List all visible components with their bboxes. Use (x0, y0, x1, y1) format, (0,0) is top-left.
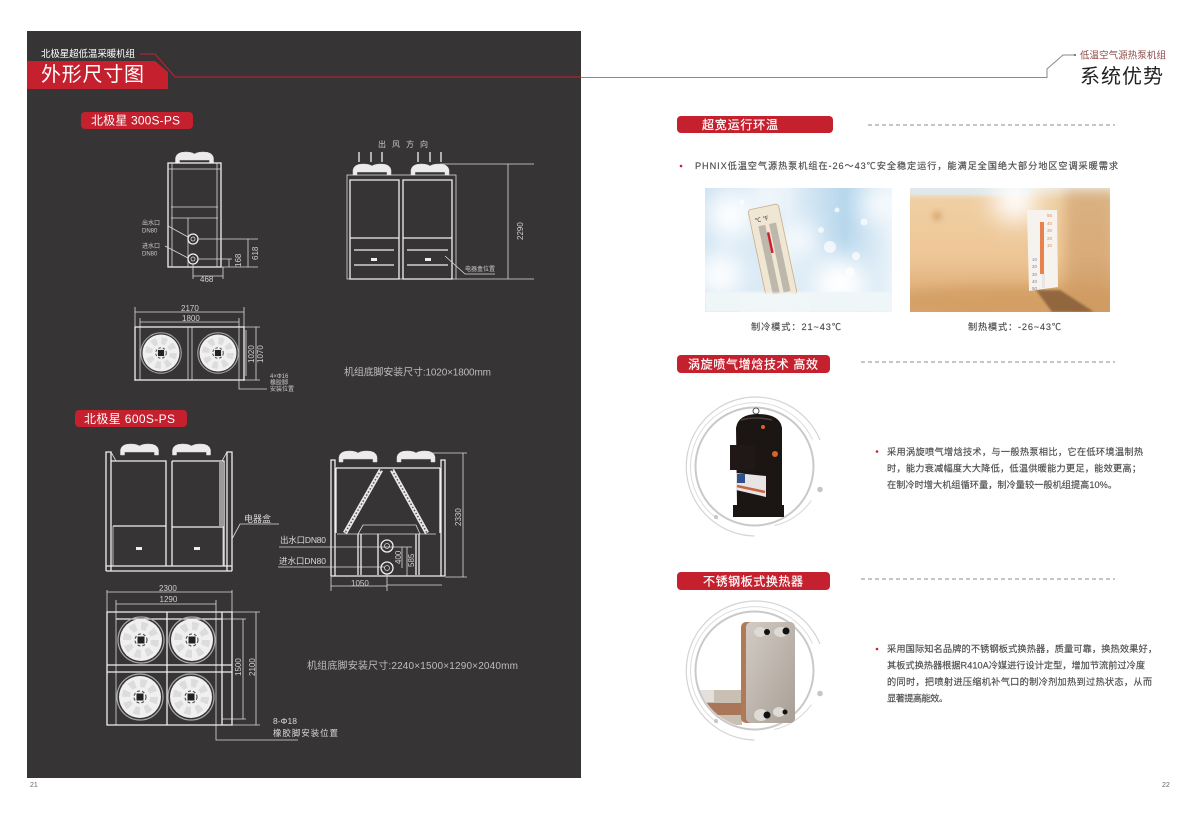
caption: heating mode: 制热模式：-26~43℃ (968, 321, 1061, 332)
panel: dark dimensions page (27, 31, 581, 778)
model pill: 600S-PS: 北极星 600S-PS (84, 412, 175, 426)
leader line: gray header rule (581, 55, 1075, 78)
drawing: 600S side view: 2330 (454, 508, 463, 526)
image: thermometer in sand (910, 188, 1110, 312)
drawing: 300S top view: 1020 (247, 345, 256, 363)
drawing: 600S side view: 400 (394, 550, 403, 564)
page number 22: 22 (1162, 782, 1170, 789)
image: thermometer in snow (705, 188, 892, 312)
heading: 系统优势 block (1074, 50, 1166, 88)
heading: 系统优势 block: 系统优势 (1080, 65, 1163, 88)
image: plate heat exchanger in rings (686, 601, 823, 740)
image: thermometer in sand: 20 (1032, 264, 1038, 269)
image: scroll compressor in rings (686, 397, 823, 536)
drawing: 600S top view: 2300 (159, 584, 177, 593)
drawing: 300S side view (142, 152, 260, 284)
drawing: 300S side view: DN80 (142, 228, 158, 234)
drawing: 300S side view: 进水口 (142, 242, 160, 250)
image: thermometer in sand: 50 (1047, 213, 1053, 218)
model pill: 300S-PS (81, 112, 193, 129)
image: thermometer in sand: 30 (1032, 272, 1038, 277)
drawing: 300S top view: 1070 (256, 345, 265, 363)
drawing: 600S side view: 1050 (351, 579, 369, 588)
image: thermometer in snow: ℃ ℉ (755, 215, 769, 225)
drawing: 300S top view: 2170 (181, 304, 199, 313)
heading subtitle: product line: 北极星超低温采暖机组 (41, 48, 135, 60)
text block: scroll injection description: 采用涡旋喷气增焓技术，与一般热泵相比，它在低环境温制热 (887, 446, 1143, 457)
drawing: 600S side view: 出水口DN80 (280, 535, 326, 545)
section heading: 不锈钢板式换热器: 不锈钢板式换热器 (703, 574, 803, 588)
image: thermometer in sand: 30 (1047, 228, 1053, 233)
image: thermometer in sand: 40 (1047, 221, 1053, 226)
intro text with bullet: PHNIX低温空气源热泵机组在-26～43℃安全稳定运行，能满足全国绝大部分地区空调采暖需求 (695, 160, 1118, 171)
section heading: 不锈钢板式换热器 (677, 572, 830, 590)
drawing: 300S side view: 出水口 (142, 219, 160, 227)
section heading: 超宽运行环温: 超宽运行环温 (702, 117, 778, 132)
drawing: 600S top view: 1500 (234, 658, 243, 676)
image: thermometer in sand: 40 (1032, 279, 1038, 284)
text block: scroll injection description: 在制冷时增大机组循环量，制冷量较一般机组提高10%。 (887, 479, 1117, 490)
heading tab: 外形尺寸图 (27, 61, 168, 89)
drawing: 300S front view: 2290 (516, 222, 525, 240)
caption: 300S foot mount size: 机组底脚安装尺寸:1020×1800mm (344, 366, 491, 378)
drawing: 300S top view: 1800 (182, 314, 200, 323)
drawing: 300S side view: 618 (251, 246, 260, 260)
section heading: 涡旋喷气增焓技术 高效 (677, 355, 830, 373)
image: thermometer in sand: 50 (1032, 286, 1038, 291)
text block: plate exchanger description: 采用国际知名品牌的不锈钢板式换热器，质量可靠，换热效果好， (887, 643, 1157, 654)
drawing: 300S front view (347, 139, 534, 279)
text block: scroll injection description (876, 446, 1143, 490)
drawing: 600S top view: 橡胶脚安装位置 (273, 728, 338, 738)
drawing: 600S top view (107, 584, 338, 740)
drawing: 300S top view: 橡胶脚 (270, 378, 288, 386)
section heading: 涡旋喷气增焓技术 高效: 涡旋喷气增焓技术 高效 (688, 356, 818, 372)
drawing: 300S side view: 468 (200, 275, 214, 284)
drawing: 600S side view (278, 451, 467, 591)
drawing: 300S side view: DN80 (142, 252, 158, 258)
text block: plate exchanger description: 显著提高能效。 (887, 692, 948, 704)
drawing: 300S top view: 安装位置 (270, 385, 294, 393)
drawing: 600S top view: 2100 (248, 658, 257, 676)
drawing: 600S side view: 585 (407, 553, 416, 567)
text block: scroll injection description: 时，能力衰减幅度大大降低，低温供暖能力更足，能效更高； (887, 462, 1141, 474)
drawing: 300S side view: 168 (234, 253, 243, 267)
drawing: 300S front view: 电器盒位置 (465, 265, 495, 273)
heading: 系统优势 block: 低温空气源热泵机组 (1080, 50, 1166, 62)
caption: cooling mode: 制冷模式：21~43℃ (751, 321, 841, 332)
drawing: 600S top view: 8-Φ18 (273, 716, 297, 726)
leader line: red header rule (140, 54, 581, 77)
text block: plate exchanger description: 的同时，把喷射进压缩机补气口的制冷剂加热到过热状态，从而 (887, 676, 1152, 687)
drawing: 600S front view (106, 444, 279, 571)
heading tab: 外形尺寸图: 外形尺寸图 (41, 63, 144, 86)
text block: plate exchanger description (876, 643, 1157, 704)
drawing: 300S top view (135, 304, 294, 393)
model pill: 300S-PS: 北极星 300S-PS (91, 114, 180, 128)
drawing: 600S front view: 电器盒 (244, 513, 271, 524)
image: thermometer in sand: 10 (1047, 243, 1053, 248)
drawing: 300S top view: 4×Φ16 (270, 374, 289, 380)
image: thermometer in sand: 20 (1047, 236, 1053, 241)
section heading: 超宽运行环温 (677, 116, 833, 133)
drawing: 600S side view: 进水口DN80 (279, 556, 326, 566)
drawing: 600S top view: 1290 (160, 595, 178, 604)
caption: 600S foot mount size: 机组底脚安装尺寸:2240×1500×1290×2040mm (307, 659, 518, 672)
drawing: 300S front view: 出风方向 (378, 139, 428, 149)
page number 21: 21 (30, 782, 38, 789)
model pill: 600S-PS (75, 410, 187, 427)
image: thermometer in sand: 10 (1032, 257, 1038, 262)
text block: plate exchanger description: 其板式换热器根据R410A冷媒进行设计定型，增加节流前过冷度 (887, 660, 1145, 670)
